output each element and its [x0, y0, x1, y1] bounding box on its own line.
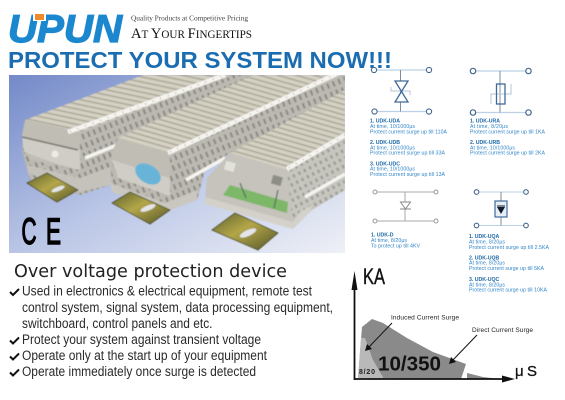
- specs: UDK-UR series: 1. UDK-URA: [470, 119, 500, 125]
- check icons: [10, 289, 19, 376]
- feature list: Operate only at the start up of your equipment: [22, 348, 267, 363]
- specs: UDK-UD series: 3. UDK-UDC: [370, 161, 400, 167]
- specs: UDK-UD series: Protect current surge up till 33A: [370, 151, 446, 157]
- specs: UDK-UQ series: [469, 234, 550, 294]
- logo: UPUN: UPUN: [8, 8, 123, 51]
- diagram: UDK-D: [373, 190, 438, 223]
- specs: UDK-UD series: Protect current surge up till 110A: [370, 130, 448, 136]
- label: 10/350: 10/350: [378, 353, 441, 376]
- specs: UDK-D: At time, 8/20μs: [371, 238, 407, 244]
- specs: UDK-UD series: 1. UDK-UDA: [370, 119, 400, 125]
- specs: UDK-UQ series: At time, 8/20μs: [469, 282, 505, 288]
- axis label: KA: KA: [363, 264, 385, 289]
- title: PROTECT YOUR SYSTEM NOW!!!: [8, 47, 392, 73]
- tagline: [131, 14, 252, 42]
- specs: UDK-UR series: Protect current surge up till 1KA: [470, 130, 546, 136]
- label: 8/20: 8/20: [359, 369, 375, 376]
- CE mark: C: [22, 211, 36, 252]
- diagram: UDK-UD: [371, 67, 432, 114]
- specs: UDK-UR series: At time, 8/20μs: [470, 124, 508, 130]
- specs: UDK-UQ series: At time, 8/20μs: [469, 239, 505, 245]
- specs: UDK-UD series: At time, 10/1000μs: [370, 167, 415, 173]
- specs: UDK-D: To protect up till 4KV: [371, 243, 421, 249]
- CE mark: E: [46, 211, 61, 252]
- axis label: μs: μ S: [515, 363, 537, 380]
- rail 1: [22, 75, 253, 204]
- feature list: Used in electronics & electrical equipment, remote test: [22, 284, 312, 299]
- specs: UDK-UQ series: Protect current surge up till 5KA: [469, 266, 545, 272]
- feature list: Protect your system against transient voltage: [22, 332, 261, 347]
- label: direct current surge: Direct Current Surge: [472, 327, 533, 334]
- direct surge area: [358, 319, 466, 379]
- specs: UDK-UR series: 2. UDK-URB: [470, 140, 500, 146]
- specs: UDK-UQ series: 3. UDK-UQC: [469, 277, 500, 283]
- rail 3: [205, 90, 345, 250]
- specs: UDK-UQ series: 1. UDK-UQA: [469, 234, 500, 240]
- specs: UDK-UR series: Protect current surge up till 2KA: [470, 151, 546, 157]
- specs: UDK-UR series: [470, 119, 546, 157]
- specs: UDK-UD series: 2. UDK-UDB: [370, 140, 400, 146]
- specs: UDK-D: 1. UDK-D: [371, 233, 394, 239]
- tagline: AT YOUR FINGERTIPS: [131, 26, 252, 42]
- feature list: Operate immediately once surge is detected: [22, 364, 256, 379]
- surge chart: [352, 264, 537, 382]
- feature list: control system, signal system, data processing equipment,: [22, 300, 333, 315]
- arrow: induced: [365, 323, 392, 351]
- arrow: direct: [449, 335, 477, 364]
- axes: [352, 271, 515, 382]
- specs: UDK-UQ series: Protect current surge up till 10KA: [469, 288, 548, 294]
- induced surge area: [358, 338, 384, 379]
- specs: UDK-UQ series: 2. UDK-UQB: [469, 255, 500, 261]
- rail 2: [110, 70, 345, 224]
- specs: UDK-UQ series: Protect current surge up till 2.5KA: [469, 245, 550, 251]
- tail of surge area: [467, 373, 500, 379]
- label: induced current surge: Induced Current Surge: [391, 314, 459, 322]
- feature list: switchboard, control panels and etc.: [22, 316, 212, 331]
- specs: UDK-UQ series: At time, 8/20μs: [469, 261, 505, 267]
- specs: UDK-UD series: [370, 119, 448, 178]
- diagram: UDK-UQ: [474, 190, 528, 228]
- green circuit board: [223, 185, 288, 213]
- specs: UDK-UD series: Protect current surge up till 13A: [370, 172, 446, 178]
- specs: UDK-UD series: At time, 10/1000μs: [370, 145, 415, 151]
- specs: UDK-D: [371, 233, 421, 249]
- product photo: [9, 70, 345, 253]
- diagram: UDK-UR: [470, 68, 531, 115]
- CE mark: [22, 217, 60, 245]
- tagline: Quality Products at Competitive Pricing: [131, 14, 248, 22]
- specs: UDK-UR series: At time, 10/1000μs: [470, 145, 515, 151]
- feature list: [10, 284, 333, 379]
- heading: over voltage: Over voltage protection device: [14, 262, 287, 282]
- blue cap: [134, 162, 162, 186]
- specs: UDK-UD series: At time, 10/1000μs: [370, 124, 415, 130]
